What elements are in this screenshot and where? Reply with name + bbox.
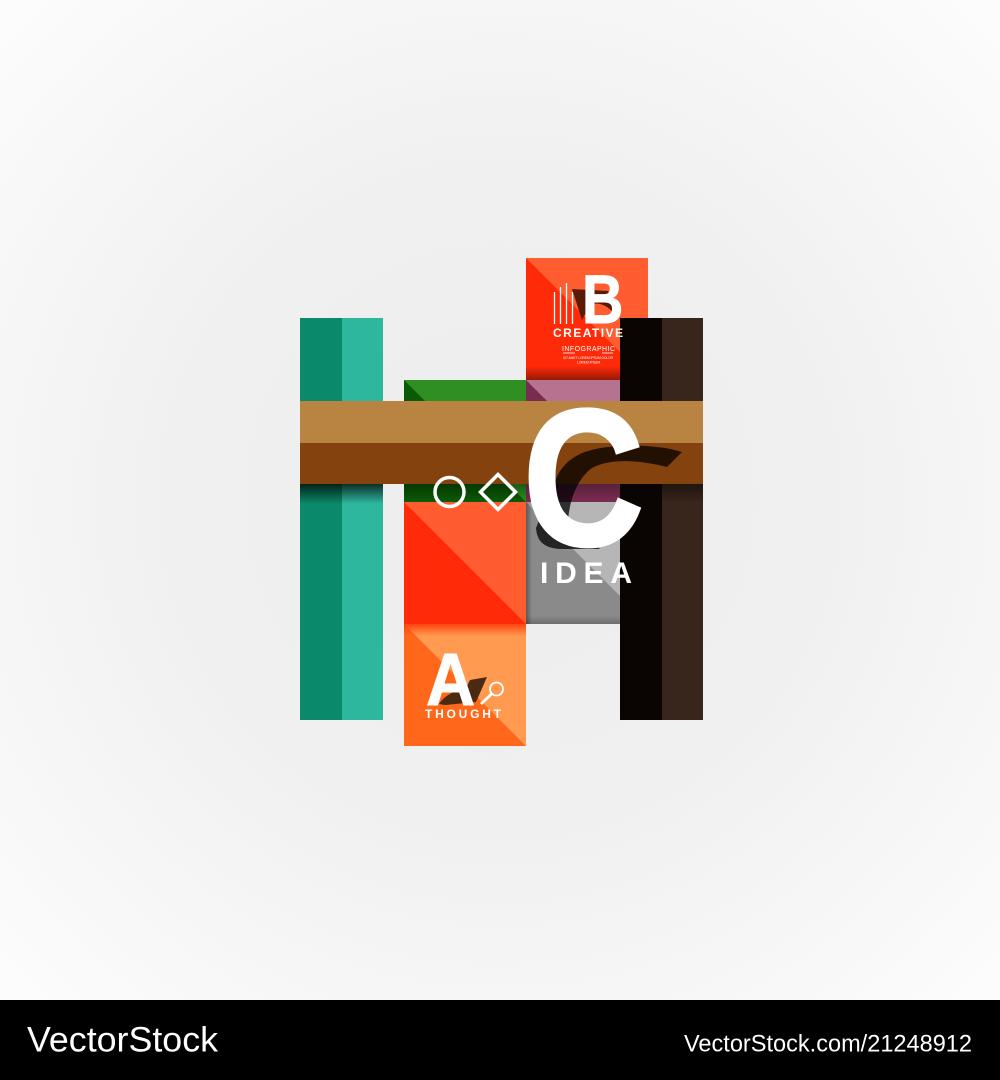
footer url: VectorStock.com/21248912 <box>684 1030 972 1058</box>
panel: orange square A <box>404 624 526 746</box>
icon: magnifier <box>481 682 503 704</box>
shadow of letter A <box>439 677 487 705</box>
icon: vertical lines <box>554 283 572 324</box>
panel: pink square <box>526 380 620 502</box>
label CREATIVE: CREATIVE <box>553 326 623 340</box>
label IDEA: IDEA <box>540 557 632 590</box>
block: letter B with CREATIVE <box>553 262 623 364</box>
panel: green square <box>404 380 526 502</box>
letter C: C <box>523 368 644 587</box>
small text line one: SIT AMET LOREM IPSUM DOLOR <box>563 356 614 360</box>
icon: diamond <box>480 474 516 510</box>
panel: black vertical bar <box>620 318 703 720</box>
panel: teal vertical bar <box>300 318 383 720</box>
label THOUGHT: THOUGHT <box>425 707 502 721</box>
underline marks <box>563 352 613 354</box>
panel: orange-red square <box>404 502 526 624</box>
block: letter C with IDEA <box>523 368 682 590</box>
letter B: B <box>582 262 623 338</box>
footer brand: VectorStock <box>27 1020 218 1060</box>
panel: red square B <box>526 258 648 380</box>
panel: gray square <box>526 502 620 624</box>
block: letter A with THOUGHT <box>425 639 503 722</box>
icon: circle <box>435 478 464 506</box>
small text line two: LOREM IPSUM <box>577 360 600 364</box>
footer bar <box>0 1000 1000 1080</box>
letter A: A <box>426 639 475 722</box>
label INFOGRAPHIC: INFOGRAPHIC <box>562 346 615 353</box>
panel: horizontal brown bar <box>300 401 703 484</box>
shadow of letter C <box>536 446 682 549</box>
shadow of letter B <box>572 289 617 320</box>
